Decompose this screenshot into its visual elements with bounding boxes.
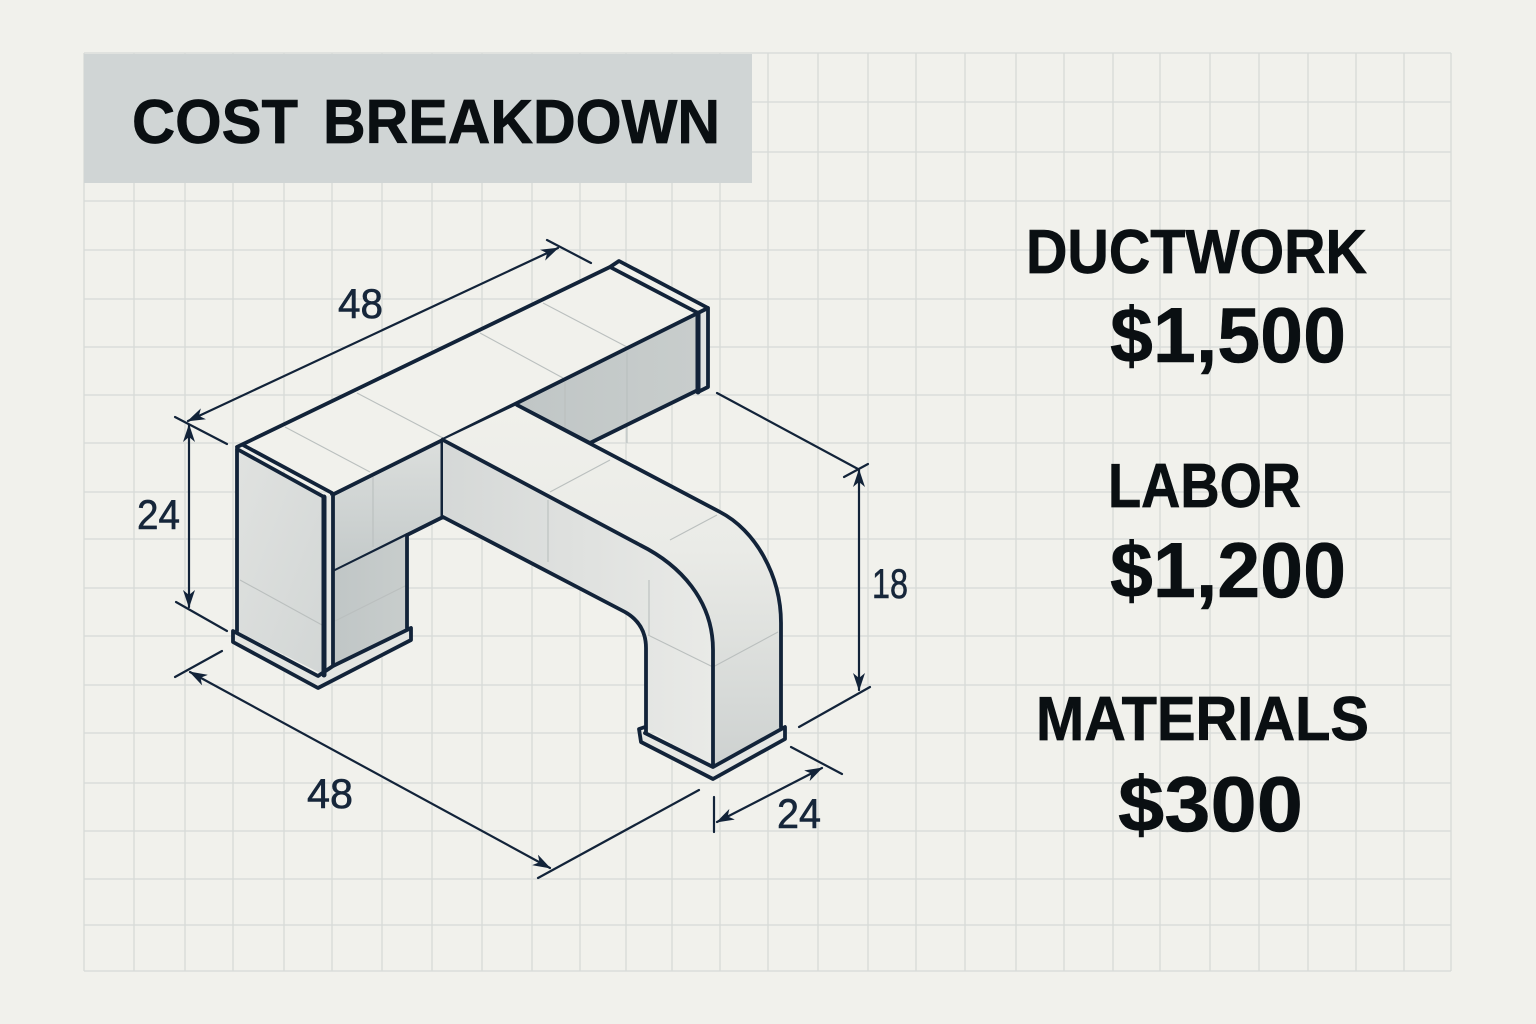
title text: BREAKDOWN (323, 88, 720, 157)
dimension: left 24: 24 (137, 491, 180, 538)
dimension: front 24 (714, 747, 842, 837)
dimension: top 48: 48 (338, 280, 383, 327)
dimension: top 48 (175, 240, 591, 444)
dimension: right 18: 18 (872, 560, 908, 607)
dimension: bottom 48: 48 (307, 770, 353, 817)
isometric ductwork diagram (137, 240, 908, 878)
branch duct with elbow (443, 405, 786, 779)
dimension: bottom 48 (175, 651, 699, 878)
left column (233, 449, 412, 688)
cost item: ductwork: $1,500 (1110, 291, 1346, 379)
cost item: ductwork: DUCTWORK (1026, 218, 1367, 287)
cost item: labor: LABOR (1108, 452, 1301, 521)
cost item: materials (1036, 685, 1369, 848)
cost item: materials: $300 (1118, 760, 1303, 848)
cost item: ductwork (1026, 218, 1367, 379)
cost item: materials: MATERIALS (1036, 685, 1369, 754)
dimension: front 24: 24 (777, 790, 821, 837)
cost item: labor (1108, 452, 1346, 614)
dimension: left 24 (137, 425, 227, 631)
dimension: right 18 (717, 393, 908, 727)
upper trunk duct (237, 261, 708, 572)
title text: COST (132, 88, 298, 157)
cost item: labor: $1,200 (1110, 526, 1346, 614)
title banner (84, 54, 752, 183)
